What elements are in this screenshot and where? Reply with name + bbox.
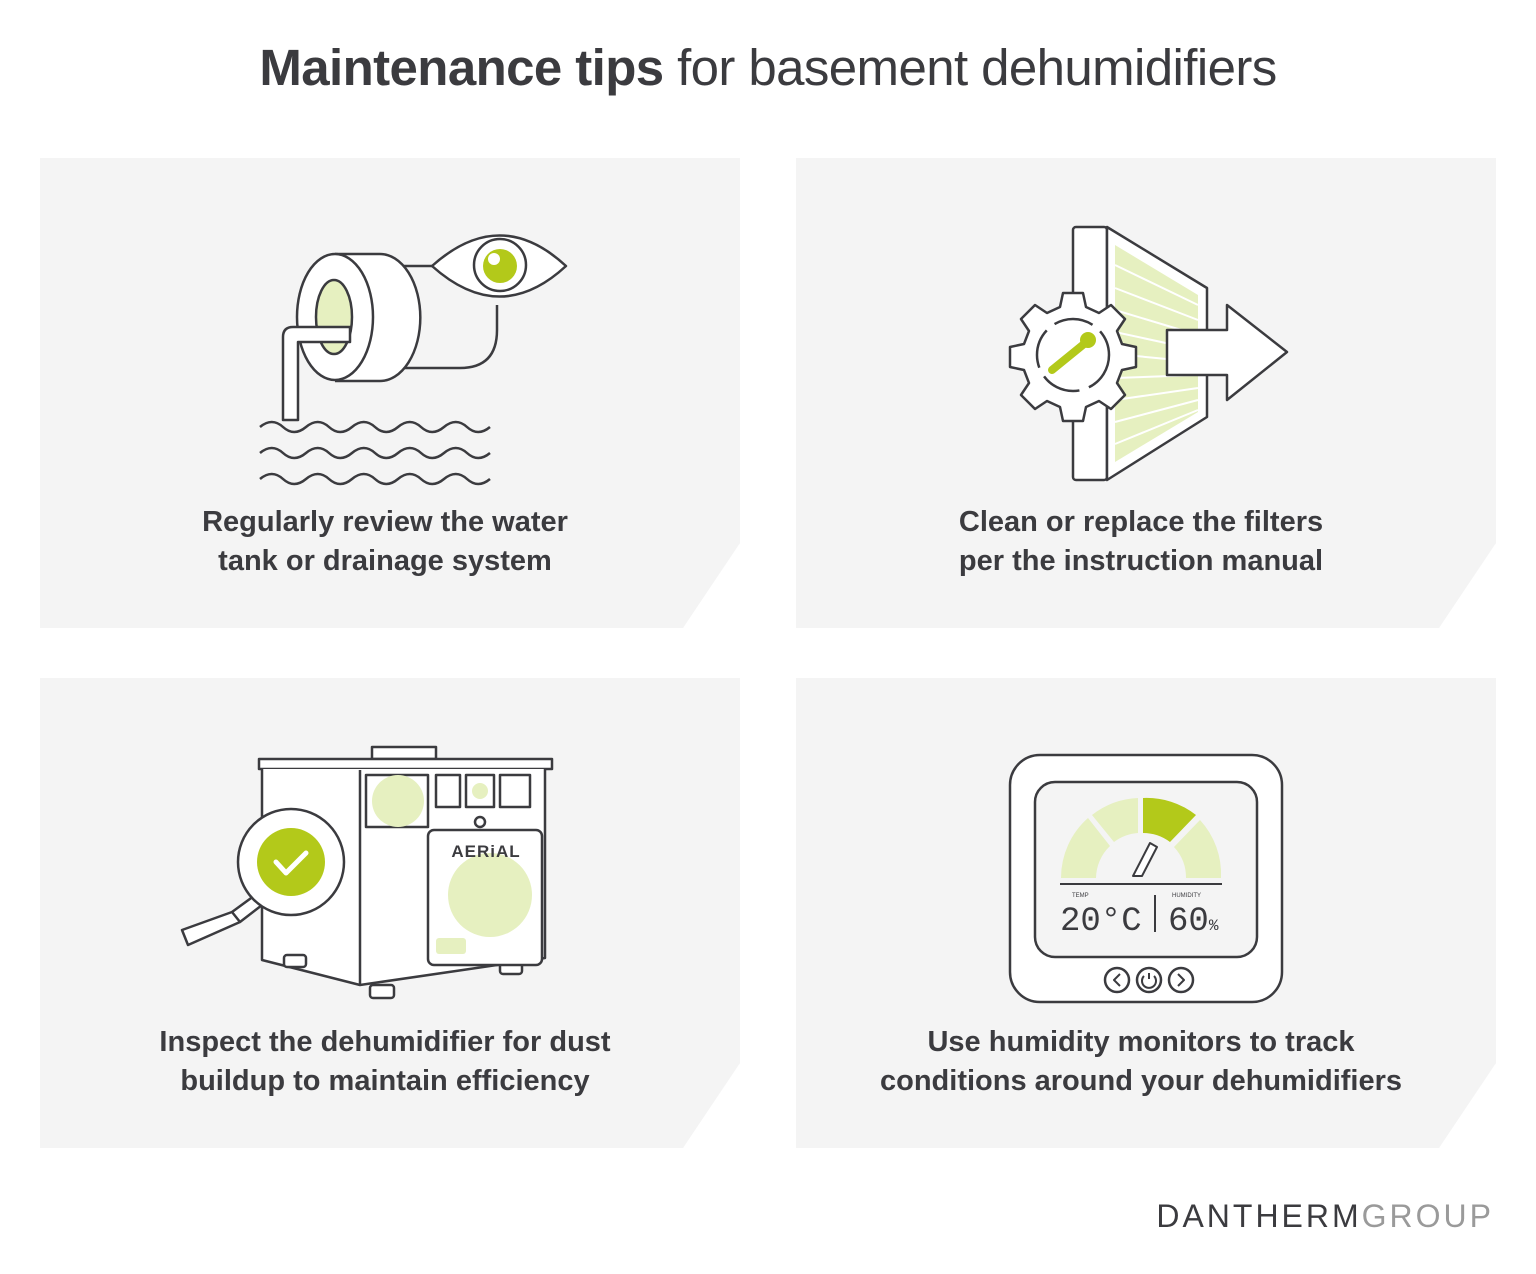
panel: humidity monitors bbox=[796, 678, 1496, 1148]
icon: humidity monitor: HUMIDITY bbox=[1172, 893, 1201, 899]
panel: filters bbox=[796, 158, 1496, 628]
text: filters bbox=[960, 510, 1322, 576]
icon: humidity monitor: 60% bbox=[1168, 903, 1219, 941]
text: filters: per the instruction manual bbox=[959, 545, 1323, 577]
title: Maintenance tips for basement dehumidifiers bbox=[259, 39, 1277, 96]
icon: filter with gear and arrow bbox=[1010, 227, 1287, 480]
text: inspect bbox=[161, 1030, 610, 1096]
icon: humidity monitor: 20°C bbox=[1060, 903, 1142, 941]
panel: water tank bbox=[40, 158, 740, 628]
text: humidity: conditions around your dehumidifiers bbox=[880, 1065, 1402, 1097]
text: humidity: Use humidity monitors to track bbox=[927, 1026, 1354, 1058]
text: inspect: Inspect the dehumidifier for dust bbox=[159, 1026, 611, 1058]
text: humidity bbox=[881, 1030, 1401, 1096]
text: water tank: tank or drainage system bbox=[218, 545, 552, 577]
text: filters: Clean or replace the filters bbox=[959, 506, 1323, 538]
text: water tank: Regularly review the water bbox=[202, 506, 568, 538]
icon: humidity monitor: TEMP bbox=[1072, 893, 1089, 899]
icon: humidity monitor bbox=[1010, 755, 1282, 1002]
icon: dehumidifier with magnifier: AERiAL bbox=[451, 842, 521, 861]
icon: dehumidifier with magnifier bbox=[182, 747, 552, 998]
logo: DANTHERMGROUP bbox=[1156, 1198, 1494, 1234]
icon: water tank with eye bbox=[260, 236, 566, 484]
panel: inspect bbox=[40, 678, 740, 1148]
text: inspect: buildup to maintain efficiency bbox=[180, 1065, 590, 1097]
text: water tank bbox=[204, 510, 568, 576]
